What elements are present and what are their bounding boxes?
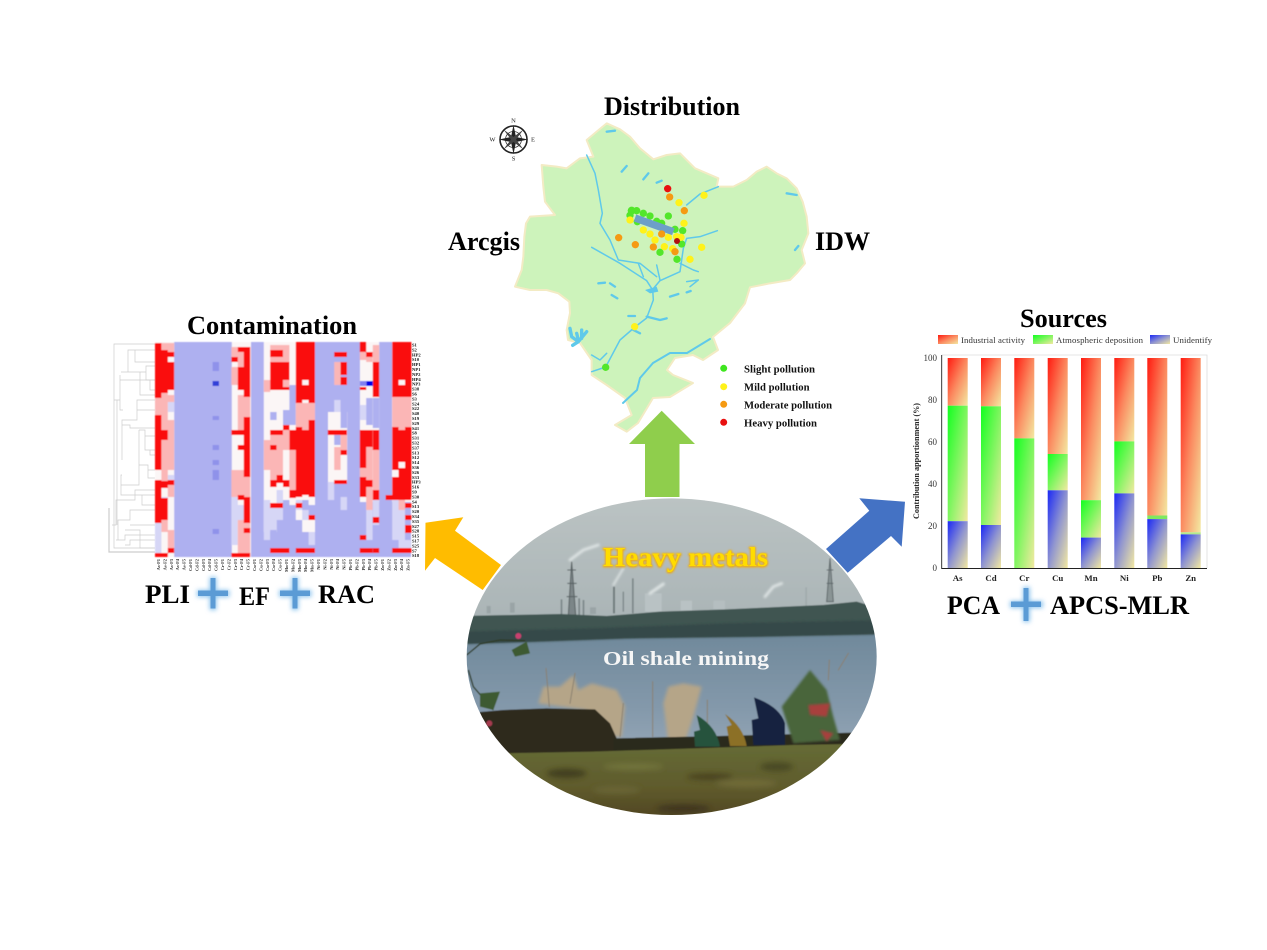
heatmap row labels: HP2	[412, 352, 421, 357]
tree shadow	[460, 620, 890, 644]
heatmap row labels: HP3	[412, 480, 421, 485]
rivers and lakes	[570, 131, 798, 403]
heatmap row labels: S36	[412, 465, 420, 470]
heatmap column labels: Cu-F3	[265, 558, 270, 571]
heatmap row labels: S24	[412, 401, 420, 406]
photo label: Oil shale mining: Oil shale mining	[603, 648, 769, 670]
heatmap row labels: S33	[412, 475, 420, 480]
x labels: Mn	[1084, 573, 1098, 583]
heatmap row labels: S18	[412, 553, 420, 558]
bar: Ni	[1114, 358, 1134, 568]
industrial skyline	[487, 578, 807, 615]
heatmap column labels: Mn-F5	[310, 558, 315, 572]
heatmap row labels: S37	[412, 445, 420, 450]
label: APCS-MLR: APCS-MLR	[1050, 591, 1189, 620]
heatmap	[155, 342, 411, 557]
icon: plus	[197, 577, 230, 610]
heatmap row labels: S35	[412, 519, 420, 524]
heatmap row labels: S13	[412, 450, 420, 455]
heatmap row labels: S34	[412, 514, 420, 519]
map outline	[515, 123, 808, 432]
y ticks	[924, 353, 938, 573]
pylon right	[827, 558, 833, 602]
heatmap row labels: S30	[412, 494, 420, 499]
map legend: Heavy pollution	[744, 418, 817, 430]
label: PCA: PCA	[947, 591, 1000, 620]
label: EF: EF	[239, 582, 270, 611]
icon: compass: E	[531, 136, 535, 144]
heatmap column labels: Mn-F2	[290, 559, 295, 572]
heatmap row labels: S7	[412, 548, 418, 553]
x labels	[953, 573, 1196, 583]
heatmap column labels: Zn-F5	[406, 558, 411, 571]
heatmap column labels: Zn-F4	[399, 558, 404, 571]
heatmap column labels: Ni-F4	[335, 558, 340, 570]
row highlight S30	[386, 495, 411, 500]
heatmap column labels: Cd-F4	[207, 558, 212, 571]
heatmap row labels: S26	[412, 470, 420, 475]
dendrogram	[109, 344, 155, 552]
heatmap column labels: Cr-F3	[233, 558, 238, 570]
heatmap column labels: Cu-F5	[278, 558, 283, 571]
heatmap column labels: Pb-F1	[348, 559, 353, 570]
y axis title: Contribution apportionment (%)	[912, 403, 921, 519]
stacked bar chart: source apportionment	[912, 353, 1207, 583]
low bushes	[616, 732, 852, 752]
red cells	[158, 342, 408, 557]
heatmap row labels: S17	[412, 538, 420, 544]
x labels: Cr	[1019, 573, 1030, 583]
heatmap row labels: S2	[412, 347, 418, 352]
heatmap row labels: S32	[412, 440, 420, 446]
heatmap row labels	[412, 342, 421, 558]
heatmap column labels: As-F2	[162, 559, 167, 570]
heatmap row labels: S12	[412, 455, 420, 460]
x labels: Pb	[1152, 573, 1163, 583]
heatmap column labels: Cu-F1	[252, 559, 257, 571]
heatmap row labels: HP1	[412, 362, 421, 367]
chart legend: Atmospheric deposition	[1056, 335, 1144, 345]
plot frame	[942, 355, 1207, 568]
photo label: Heavy metals: Heavy metals	[603, 542, 768, 572]
icon: plus	[1010, 587, 1043, 622]
bar: Cr	[1014, 358, 1034, 568]
bar: Mn	[1081, 358, 1101, 568]
darkest blue cell	[366, 381, 373, 386]
red flowers	[808, 703, 833, 742]
sampling points: heavy pollution	[664, 185, 680, 244]
white cells	[155, 342, 411, 557]
y ticks: 20	[928, 521, 938, 531]
heatmap column labels: Pb-F2	[354, 559, 359, 570]
y ticks: 100	[924, 353, 938, 363]
heatmap column labels: As-F4	[175, 558, 180, 570]
shrub right	[782, 670, 840, 743]
heatmap column labels: Ni-F2	[322, 559, 327, 570]
y ticks: 80	[928, 395, 938, 405]
heatmap row labels: S15	[412, 534, 420, 539]
label: RAC: RAC	[318, 580, 375, 609]
label: PLI: PLI	[145, 580, 190, 609]
heatmap column labels: Mn-F4	[303, 558, 308, 572]
sign: navy fin	[752, 697, 785, 745]
heatmap column labels: Mn-F3	[297, 558, 302, 572]
heatmap column labels: Cr-F2	[226, 559, 231, 570]
sampling points: moderate pollution	[615, 193, 688, 255]
bar: Zn	[1181, 358, 1201, 568]
reeds	[538, 675, 702, 738]
arrow: up to distribution	[629, 411, 695, 497]
icon: compass: S	[512, 156, 516, 162]
heatmap column labels: Ni-F5	[342, 558, 347, 570]
grass patches	[547, 762, 793, 812]
heatmap column labels: Cu-F4	[271, 558, 276, 571]
heatmap row labels: S3	[412, 396, 418, 401]
smoke	[570, 545, 782, 597]
heatmap column labels: Cd-F1	[188, 559, 193, 571]
heatmap row labels: NP2	[412, 372, 421, 377]
title: Contamination: Contamination	[187, 311, 358, 340]
sampling points: mild pollution	[626, 192, 708, 330]
heatmap row labels: S31	[412, 436, 420, 441]
heatmap row labels: S25	[412, 543, 420, 548]
icon: compass: N	[511, 118, 516, 124]
heatmap row labels: S28	[412, 529, 420, 534]
heatmap column labels: Zn-F2	[386, 559, 391, 571]
pylon left	[567, 562, 577, 615]
cells in Cd column	[213, 362, 219, 534]
arrow: right to sources	[826, 498, 905, 573]
x labels: Cu	[1052, 573, 1063, 583]
heatmap row labels: S13	[412, 504, 420, 509]
dark blue cell in Pb	[360, 381, 366, 386]
bar: Pb	[1147, 358, 1167, 568]
heatmap row labels: S14	[412, 460, 420, 465]
tree line	[460, 602, 890, 644]
heatmap row labels: S27	[412, 524, 420, 529]
map legend: Moderate pollution	[744, 400, 832, 412]
heatmap column labels: Cd-F5	[214, 558, 219, 571]
sampling points: slight pollution	[602, 207, 686, 371]
title: Distribution: Distribution	[604, 92, 741, 121]
heatmap row labels: HP4	[412, 377, 421, 382]
lake	[645, 287, 658, 293]
water	[466, 634, 877, 739]
heatmap column labels: Cu-F2	[258, 559, 263, 571]
photo: oil shale mining landscape	[460, 490, 890, 820]
label: Arcgis: Arcgis	[448, 227, 520, 256]
dark blue cell	[213, 381, 219, 386]
heatmap column labels: Pb-F4	[367, 558, 372, 570]
heatmap row labels: S6	[412, 392, 418, 396]
x labels: As	[953, 573, 963, 583]
heatmap row labels: S16	[412, 485, 420, 490]
heatmap row labels: S8	[412, 431, 418, 436]
mining belt	[635, 218, 673, 232]
heatmap column labels: Mn-F1	[284, 559, 289, 572]
map: study area with sampling points	[515, 123, 808, 432]
x labels: Zn	[1185, 573, 1196, 583]
heatmap column labels: Cd-F3	[201, 558, 206, 571]
heatmap column labels: Cr-F5	[246, 558, 251, 570]
flowering branch	[467, 640, 525, 710]
axes	[942, 355, 1207, 568]
heatmap column labels: Cr-F1	[220, 559, 225, 570]
grass	[508, 744, 843, 815]
heatmap column labels: As-F5	[182, 558, 187, 570]
y ticks: 40	[928, 479, 938, 489]
label: IDW: IDW	[815, 227, 870, 256]
lavender cells	[273, 385, 376, 548]
chart legend	[938, 335, 1213, 345]
map legend	[720, 364, 832, 430]
heatmap column labels: As-F3	[169, 558, 174, 570]
y ticks: 0	[932, 563, 938, 573]
heatmap column labels: Zn-F3	[393, 558, 398, 571]
heatmap column labels: Ni-F3	[329, 558, 334, 570]
heatmap column labels: Cd-F2	[194, 559, 199, 571]
bar: Cd	[981, 358, 1001, 568]
heatmap row labels: S22	[412, 406, 420, 411]
heatmap row labels: S38	[412, 387, 420, 392]
y ticks: 60	[928, 437, 938, 447]
hedge	[480, 708, 617, 754]
x labels: Ni	[1120, 573, 1129, 583]
heatmap row labels: S41	[412, 426, 420, 431]
sign: green fin	[694, 715, 720, 747]
heatmap row labels: S9	[412, 490, 418, 494]
heatmap column labels	[156, 558, 411, 572]
light pink cells	[158, 343, 408, 553]
sign: gold fin	[725, 714, 747, 746]
arrow: left to contamination	[425, 517, 501, 590]
heatmap column labels: Pb-F3	[361, 558, 366, 570]
heatmap row labels: S4	[412, 499, 418, 504]
heatmap row labels: NP1	[412, 367, 421, 372]
title: Sources: Sources	[1020, 304, 1107, 333]
icon: plus	[279, 577, 312, 610]
icon: compass: W	[489, 136, 496, 144]
heatmap column labels: Ni-F1	[316, 559, 321, 570]
heatmap background	[155, 342, 411, 557]
reed stems	[546, 653, 848, 737]
chart legend: Industrial activity	[961, 335, 1026, 345]
heatmap row labels: S10	[412, 357, 420, 362]
icon: compass	[489, 118, 535, 162]
branch leaves	[480, 642, 530, 710]
heatmap row labels: S1	[412, 342, 418, 348]
x labels: Cd	[985, 573, 997, 583]
pale lavender cells	[158, 400, 408, 557]
bar: Cu	[1048, 358, 1068, 568]
heatmap column labels: As-F1	[156, 559, 161, 570]
map legend: Mild pollution	[744, 382, 810, 394]
photo label: Heavy metals: Heavy metals	[603, 542, 768, 572]
heatmap row labels: S29	[412, 421, 420, 426]
heatmap column labels: Zn-F1	[380, 559, 385, 571]
heatmap column labels: Cr-F4	[239, 558, 244, 570]
map legend: Slight pollution	[744, 364, 815, 376]
heatmap column labels: Pb-F5	[374, 558, 379, 570]
heatmap row labels: S19	[412, 416, 420, 421]
lake fingers	[570, 328, 587, 345]
chart legend: Unidentify	[1173, 335, 1213, 345]
heatmap row labels: S40	[412, 411, 420, 416]
bar: As	[948, 358, 968, 568]
heatmap row labels: S20	[412, 509, 420, 514]
heatmap row labels: NP3	[412, 382, 421, 387]
